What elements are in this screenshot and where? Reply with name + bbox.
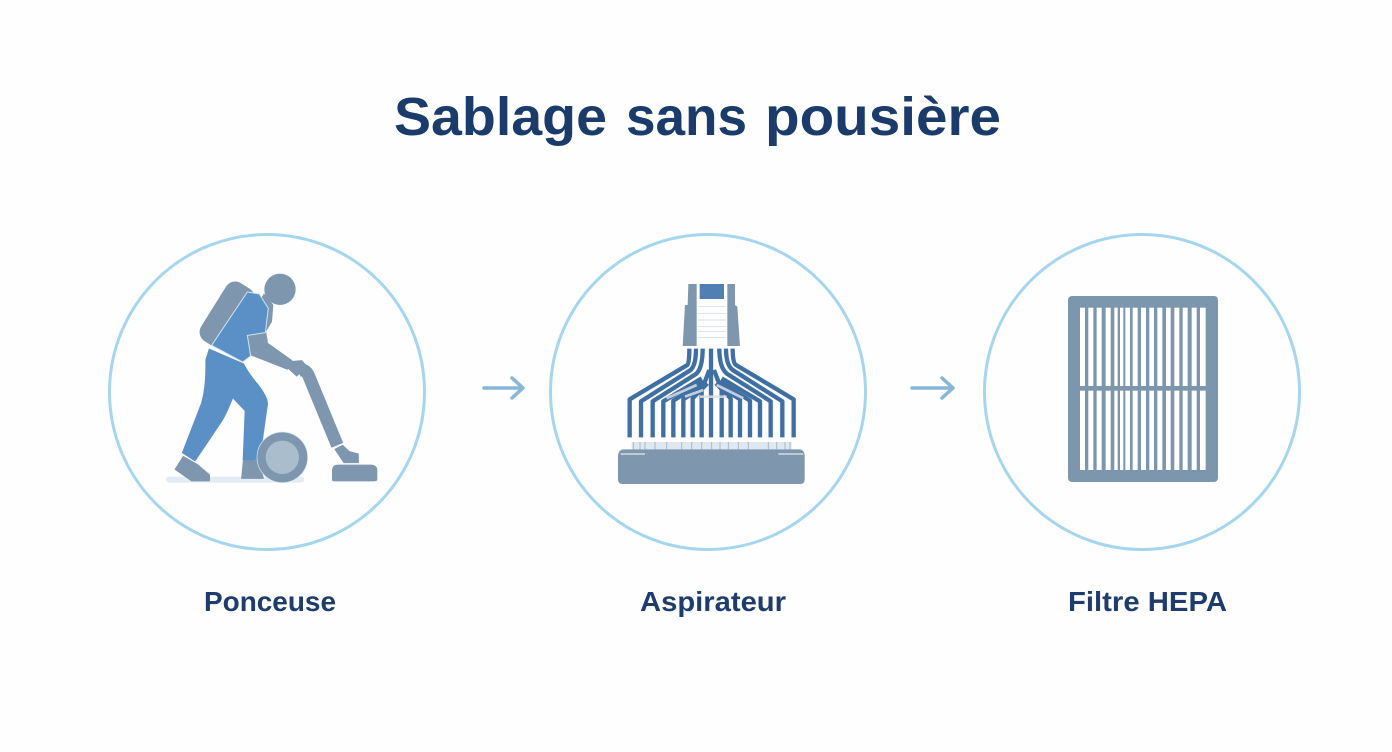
circle outline: aspirateur [550,234,866,550]
panel: ponceuse [110,234,424,550]
wheel [257,432,308,483]
torso [212,292,268,362]
top left housing [683,284,697,346]
top right housing [727,284,740,346]
icon: worker with sander [166,274,377,483]
base highlights [621,452,803,455]
title: sans [626,87,747,147]
manifold tubes [630,349,794,437]
wheel hub [266,441,299,474]
filter slots lower [1080,391,1206,470]
top window [700,284,724,299]
front shoe [175,457,209,481]
label: Ponceuse: Ponceuse [204,586,336,617]
arrow: ponceuse to aspirateur [484,378,523,398]
head [264,274,296,305]
panel: aspirateur [550,234,866,550]
back shoe [242,461,263,478]
backpack [196,277,259,352]
arrow: aspirateur to filtre [912,378,953,398]
base [618,449,805,484]
legs [183,349,267,461]
panel: filtre HEPA [984,234,1300,550]
hose foot [335,445,358,463]
hose [298,370,337,445]
filter frame [1068,296,1218,482]
icon: vacuum manifold [618,284,805,484]
label: Filtre HEPA: Filtre HEPA [1068,586,1227,617]
title: pousière [765,87,1001,147]
filter slots upper [1080,308,1206,386]
label: Aspirateur: Aspirateur [640,586,786,617]
ribbed neck [698,307,726,338]
faded highlight [667,385,743,398]
title: Sablage [394,87,607,147]
circle outline: ponceuse [110,234,424,550]
circle outline: filtre [984,234,1300,550]
hand [288,361,307,376]
neck [260,293,273,332]
arm [247,331,292,369]
title [394,87,1001,147]
icon: HEPA filter [1068,296,1218,482]
base grille [632,442,792,450]
floor shadow [166,477,304,483]
sander head [332,465,377,481]
